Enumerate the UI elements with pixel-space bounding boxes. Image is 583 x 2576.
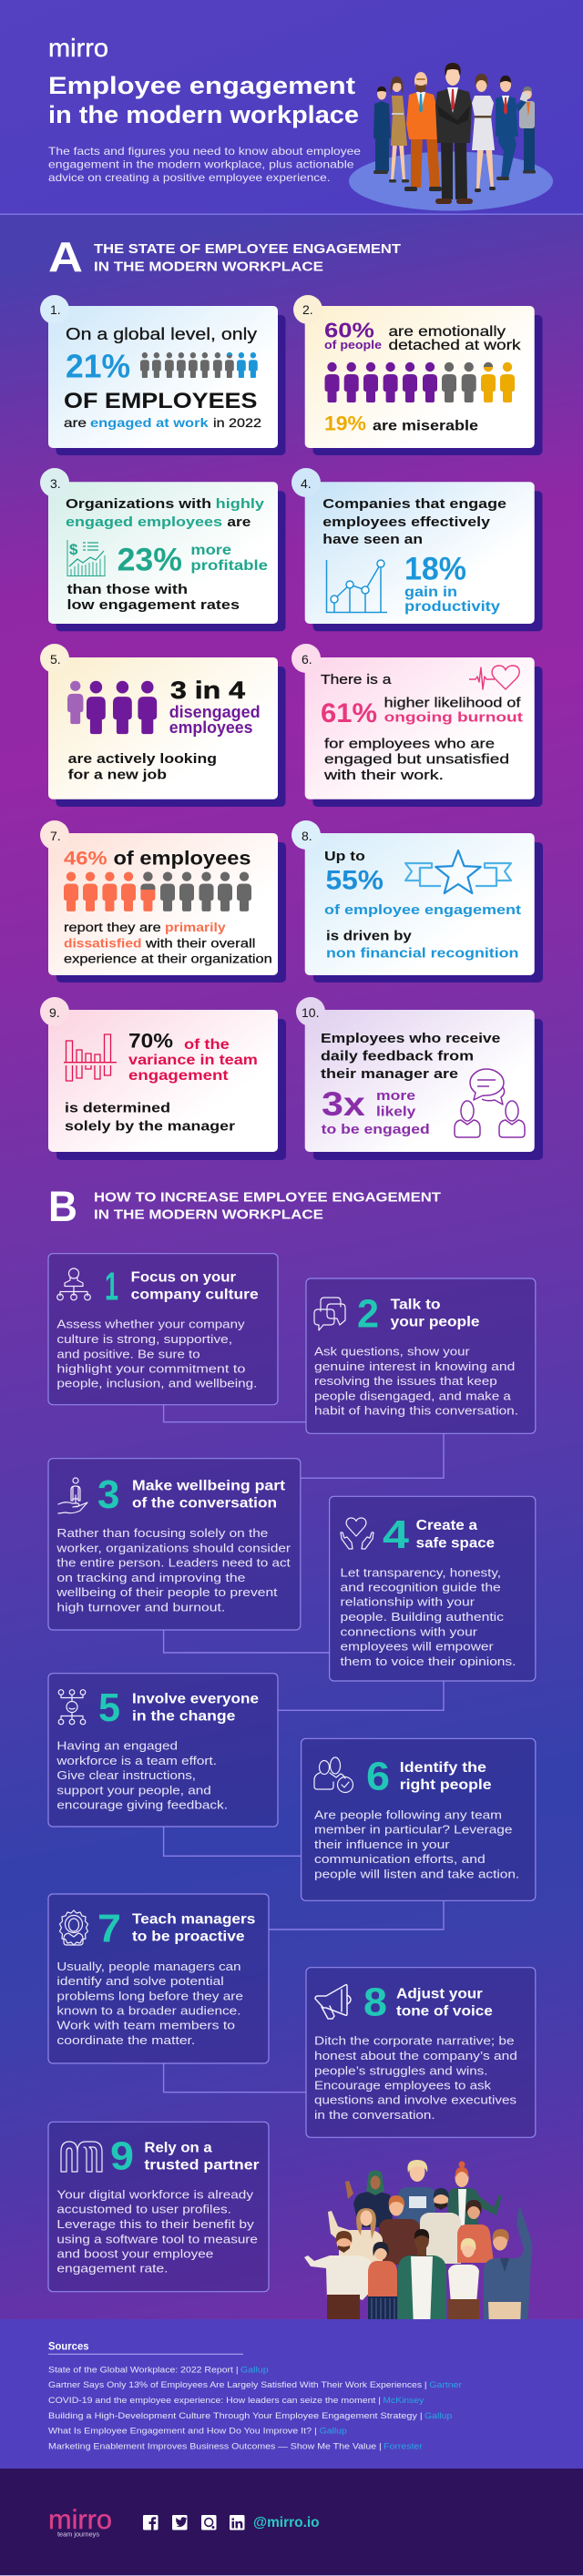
- body text: and recognition guide the: [341, 1581, 501, 1594]
- card 4 stat: 18%: 18%: [404, 552, 466, 587]
- connector 4 to 5: [278, 1681, 444, 1710]
- heading: [131, 1270, 259, 1303]
- card 1 label: [64, 389, 261, 430]
- card 8 closing text: non financial recognition: [326, 947, 518, 962]
- number 3: 3: [97, 1472, 119, 1517]
- heading: trusted partner: [144, 2157, 259, 2173]
- body text: using a software tool to measure: [56, 2232, 258, 2245]
- heading: [132, 1479, 286, 1512]
- card 4 statement: Companies that engage: [322, 497, 506, 512]
- person tan dress: [389, 76, 409, 182]
- body text: culture is strong, supportive,: [56, 1332, 232, 1346]
- body text: Give clear instructions,: [56, 1768, 196, 1782]
- source 2: Gartner: [429, 2380, 463, 2390]
- body text: known to a broader audience.: [56, 2004, 241, 2018]
- panel 3: wellbeing: [48, 1459, 301, 1630]
- source 2: Gartner Says Only 13% of Employees Are Largely Satisfied With Their Work Experiences |: [48, 2380, 427, 2390]
- card 1 label: OF EMPLOYEES: [64, 389, 257, 413]
- card 2 stat: 60%: [324, 319, 382, 351]
- icon: org chart: [57, 1268, 90, 1300]
- title: in the modern workplace: [48, 101, 359, 128]
- card 9 label: variance in team: [128, 1053, 258, 1068]
- card 6 label: ongoing burnout: [384, 711, 523, 726]
- number 4: 4: [383, 1512, 410, 1557]
- card 10 label: [322, 1088, 430, 1137]
- icon: gear with person: [60, 1910, 87, 1945]
- card 2 statement: [388, 324, 522, 353]
- header band: [0, 0, 583, 215]
- sources band: [0, 2319, 583, 2469]
- card 7 stat: 46% of employees: of employees: [113, 848, 251, 869]
- person white dress: [472, 74, 496, 192]
- card 4 label: [404, 585, 500, 615]
- card 5 closing text: are actively looking: [68, 752, 217, 767]
- body text: [56, 1960, 243, 2047]
- card 2 stat: 60%: of people: [324, 338, 382, 351]
- card 7: dissatisfied: [40, 820, 286, 983]
- heading: [416, 1518, 495, 1551]
- card 9: manager variance: [40, 997, 286, 1160]
- heading: Create a: [416, 1518, 477, 1533]
- sources heading: Sources: [48, 2342, 89, 2353]
- panel 7: managers: [48, 1894, 269, 2063]
- front row: [304, 2205, 532, 2328]
- heading: [391, 1297, 480, 1330]
- card 7: dissatisfied: 7.: [50, 829, 61, 843]
- heading: to be proactive: [132, 1929, 245, 1945]
- heading: of the conversation: [132, 1496, 277, 1512]
- body text: people will listen and take action.: [314, 1867, 519, 1880]
- card 2 statement: are emotionally: [388, 324, 506, 340]
- illustration: business team: [349, 63, 553, 211]
- section heading B: IN THE MODERN WORKPLACE: [94, 1207, 323, 1223]
- body text: relationship with your: [341, 1595, 476, 1609]
- card 5: job seekers: 5.: [50, 652, 61, 667]
- icon: heartbeat: [469, 666, 519, 689]
- connector 7 to 8: [164, 2063, 306, 2092]
- card 3 label: [190, 543, 268, 574]
- heading: Rely on a: [144, 2140, 212, 2155]
- card 8: recognition: [292, 820, 543, 983]
- card 7 stat: 46% of employees: 46%: [64, 848, 107, 869]
- card 7 stat: 46% of employees: [64, 848, 251, 869]
- card 5 label: employees: [169, 718, 253, 737]
- card 6 closing text: [323, 738, 509, 783]
- body text: connections with your: [341, 1624, 478, 1638]
- card 9 label: engagement: [128, 1068, 229, 1084]
- body text: Ask questions, show your: [314, 1345, 470, 1359]
- body text: employees will empower: [341, 1640, 494, 1654]
- source 5: What Is Employee Engagement and How Do You Improve It? |: [48, 2427, 317, 2437]
- card 4 statement: [322, 497, 506, 547]
- intro text: advice on creating a positive employee experience.: [48, 171, 330, 184]
- panel 8: tone of voice: [306, 1968, 536, 2137]
- logo: mirro: mirro: [48, 34, 108, 62]
- body text: the entire person. Leaders need to act: [56, 1556, 291, 1570]
- card 6: burnout: 6.: [302, 652, 312, 667]
- source 3: McKinsey: [383, 2396, 424, 2406]
- card 9 closing text: is determined: [65, 1101, 170, 1116]
- icon: star with ribbon: [405, 850, 511, 893]
- heading: company culture: [131, 1288, 259, 1303]
- body text: resolving the issues that keep: [314, 1374, 497, 1388]
- body text: support your people, and: [56, 1783, 211, 1797]
- card 5 closing text: [68, 752, 217, 783]
- heading: Involve everyone: [132, 1691, 259, 1706]
- icon: people with check: [314, 1757, 353, 1792]
- section heading A: [48, 233, 401, 280]
- panel 4: safe space: [330, 1496, 536, 1681]
- card 10 label: more: [376, 1088, 415, 1104]
- card 8 closing text: is driven by: [326, 930, 412, 944]
- body text: communication efforts, and: [314, 1852, 486, 1866]
- card 6 closing text: engaged but unsatisfied: [324, 753, 509, 768]
- connector 6 to 7: [269, 1900, 444, 1929]
- card 9 stat: 70%: 70%: [128, 1030, 173, 1053]
- card 6 intro: There is a: [321, 672, 392, 687]
- heading: in the change: [132, 1708, 236, 1724]
- card 3 label: profitable: [190, 558, 268, 574]
- card 3 statement: are: [227, 515, 251, 530]
- icon: facebook: [143, 2515, 159, 2530]
- body text: them to voice their opinions.: [341, 1655, 516, 1668]
- body text: workforce is a team effort.: [56, 1754, 217, 1767]
- source 4: Building a High-Development Culture Through Your Employee Engagement Strategy |: [48, 2411, 423, 2421]
- card 5 closing text: for a new job: [68, 769, 167, 783]
- handle: @mirro.io: [253, 2515, 320, 2530]
- body text: people, inclusion, and wellbeing.: [56, 1377, 257, 1390]
- card 3 closing text: than those with: [67, 583, 188, 597]
- card 1: global engagement: [40, 295, 286, 455]
- person black suit: [435, 63, 473, 204]
- card 7 closing text: dissatisfied: [64, 937, 142, 951]
- panel 5: involve everyone: [48, 1674, 278, 1827]
- body text: questions and involve executives: [314, 2093, 517, 2107]
- card 7 closing text: experience at their organization: [64, 952, 272, 966]
- card 6 label: [384, 697, 523, 726]
- body text: accustomed to user profiles.: [56, 2203, 231, 2216]
- icon: heart in hands: [341, 1518, 373, 1549]
- body text: [56, 1318, 257, 1390]
- card 5 label: disengaged: [169, 703, 261, 721]
- heading: right people: [400, 1777, 492, 1793]
- section heading A: IN THE MODERN WORKPLACE: [94, 259, 323, 275]
- panel 2: talk to your people: [306, 1278, 536, 1433]
- body text: their influence in your: [314, 1838, 450, 1851]
- connector 5 to 6: [164, 1827, 302, 1856]
- number 6: 6: [366, 1755, 390, 1799]
- card 4 label: gain in: [404, 585, 457, 600]
- card 1 statement: On a global level, only: [66, 325, 257, 343]
- body text: member in particular? Leverage: [314, 1823, 512, 1837]
- card 3 label: more: [190, 543, 231, 558]
- icon: bar chart: [64, 1034, 117, 1081]
- card 4: productivity: [292, 468, 543, 631]
- icon: line chart: [326, 560, 387, 612]
- card 4 statement: have seen an: [322, 533, 423, 547]
- body text: high turnover and burnout.: [56, 1600, 225, 1614]
- source 1: Gallup: [240, 2365, 269, 2375]
- icon: linkedin: [230, 2515, 244, 2530]
- number 5: 5: [98, 1685, 120, 1730]
- card 8 closing text: [326, 930, 518, 962]
- card 10: daily feedback: [296, 997, 543, 1160]
- body text: on tracking and improving the: [56, 1571, 245, 1584]
- card 2 stat: 60%: 60%: [324, 319, 374, 342]
- heading: your people: [391, 1315, 480, 1330]
- card 10 statement: Employees who receive: [321, 1032, 500, 1046]
- card 10 statement: daily feedback from: [321, 1049, 474, 1064]
- person navy right: [496, 76, 529, 180]
- heading: tone of voice: [396, 2003, 493, 2019]
- body text: [314, 1807, 519, 1880]
- card 7 closing text: with their overall: [145, 937, 255, 951]
- card 6 closing text: for employees who are: [324, 738, 495, 752]
- body text: [56, 2187, 258, 2276]
- body text: Work with team members to: [56, 2019, 235, 2032]
- card 7 closing text: [64, 921, 272, 966]
- card 8: recognition: 8.: [302, 829, 312, 843]
- card 8 intro: Up to: [324, 849, 365, 864]
- card 1 label: are: [64, 415, 87, 430]
- title: Employee engagement: [48, 72, 355, 99]
- card 4: productivity: 4.: [301, 476, 312, 491]
- middle row: [328, 2188, 494, 2265]
- card 10: daily feedback: 10.: [302, 1005, 319, 1020]
- card 5 people chart: [67, 681, 157, 734]
- card 6: burnout: [292, 644, 543, 807]
- heading: [400, 1760, 492, 1793]
- body text: [314, 1345, 518, 1418]
- card 2 statement: detached at work: [388, 338, 522, 353]
- source 3: COVID-19 and the employee experience: How leaders can seize the moment |: [48, 2396, 381, 2406]
- panel 9: trusted partner: [48, 2122, 269, 2292]
- card 2 stat: 19% miserable: [324, 412, 478, 435]
- heading: Focus on your: [131, 1270, 236, 1286]
- body text: Rather than focusing solely on the: [56, 1526, 268, 1540]
- icon: instagram: [201, 2515, 217, 2530]
- card 9 label: [128, 1037, 258, 1084]
- card 1: global engagement: 1.: [50, 302, 61, 317]
- source 4: Gallup: [424, 2411, 452, 2421]
- card 9: manager variance: 9.: [49, 1005, 60, 1020]
- body text: people disengaged, and make a: [314, 1389, 512, 1402]
- card 9 closing text: [65, 1101, 235, 1135]
- number 9: 9: [110, 2134, 134, 2179]
- body text: problems long before they are: [56, 1989, 243, 2002]
- icon: mirro mark: [61, 2142, 102, 2172]
- icon: finance chart: $: [69, 541, 78, 558]
- card 10 stat: 3x: 3x: [322, 1085, 365, 1123]
- body text: Your digital workforce is already: [56, 2187, 254, 2201]
- icon: person on hand: [58, 1478, 87, 1513]
- card 9 closing text: solely by the manager: [65, 1119, 235, 1135]
- heading: Adjust your: [396, 1986, 483, 2001]
- body text: and positive. Be sure to: [56, 1347, 200, 1360]
- body text: [314, 2034, 517, 2122]
- card 2 people chart: [324, 362, 515, 402]
- body text: people. Building authentic: [341, 1610, 505, 1624]
- number 2: 2: [357, 1291, 379, 1336]
- section heading B: [48, 1182, 441, 1230]
- heading: Teach managers: [132, 1912, 256, 1928]
- icon: conversation: [455, 1069, 525, 1137]
- person orange suit: [404, 72, 442, 191]
- icon: speech bubbles: [314, 1298, 345, 1330]
- heading: Identify the: [400, 1760, 486, 1776]
- heading: Talk to: [391, 1297, 441, 1312]
- body text: [56, 1739, 228, 1812]
- body text: and boost your employee: [56, 2246, 213, 2260]
- body text: Ditch the corporate narrative; be: [314, 2034, 514, 2048]
- person navy left: [373, 87, 391, 174]
- title: [48, 72, 359, 128]
- icon: finance chart: [67, 540, 105, 575]
- card 3 statement: [66, 497, 264, 530]
- card 3: profitable: [40, 468, 286, 631]
- card 5 label: [169, 703, 261, 737]
- body text: Leverage this to their benefit by: [56, 2217, 254, 2231]
- source 5: Gallup: [320, 2427, 347, 2437]
- intro text: The facts and figures you need to know about employee: [48, 145, 361, 158]
- card 2 stat: 19% miserable: are miserable: [373, 419, 478, 434]
- panel 1: company culture: [48, 1254, 278, 1405]
- body text: worker, organizations should consider: [56, 1541, 292, 1554]
- card 6 label: higher likelihood of: [384, 697, 522, 711]
- card 4 statement: employees effectively: [322, 515, 490, 530]
- card 10 statement: their manager are: [321, 1067, 458, 1082]
- card 1 label: engaged at work: [90, 415, 209, 430]
- card 9 label: of the: [184, 1037, 230, 1053]
- body text: in the conversation.: [314, 2108, 435, 2122]
- body text: wellbeing of their people to prevent: [56, 1585, 278, 1599]
- illustration: diverse crowd: [304, 2160, 532, 2328]
- heading: [132, 1912, 256, 1945]
- body text: [56, 1526, 292, 1614]
- body text: Having an engaged: [56, 1739, 178, 1753]
- source 6: Forrester: [384, 2442, 424, 2452]
- heading: safe space: [416, 1535, 495, 1551]
- card 8 stat: 55%: 55%: [326, 866, 384, 896]
- card 7 closing text: primarily: [165, 921, 226, 934]
- section heading B: HOW TO INCREASE EMPLOYEE ENGAGEMENT: [94, 1189, 441, 1205]
- intro text: engagement in the modern workplace, plus actionable: [48, 158, 354, 171]
- card 8 label: of employee engagement: [324, 903, 521, 918]
- connector 2 to 3: [301, 1433, 444, 1478]
- body text: Encourage employees to ask: [314, 2079, 492, 2092]
- body text: Assess whether your company: [56, 1318, 245, 1331]
- card 4 label: productivity: [404, 599, 500, 615]
- card 3 closing text: [67, 583, 240, 613]
- intro text: [48, 145, 361, 184]
- body text: identify and solve potential: [56, 1974, 224, 1988]
- card 3: profitable: 3.: [50, 476, 61, 491]
- icon: team tree: [58, 1690, 86, 1725]
- footer logo: mirro: [48, 2505, 112, 2535]
- card 7 closing text: report they are: [64, 921, 161, 934]
- card 6 closing text: with their work.: [323, 769, 444, 783]
- section heading A: A: [48, 233, 83, 280]
- icon: twitter: [172, 2515, 188, 2530]
- body text: honest about the company’s and: [314, 2049, 517, 2062]
- heading: Make wellbeing part: [132, 1479, 286, 1494]
- body text: coordinate the matter.: [56, 2033, 195, 2047]
- card 2: emotionally detached: 2.: [302, 302, 313, 317]
- source 1: State of the Global Workplace: 2022 Report |: [48, 2365, 239, 2375]
- card 5: job seekers: [40, 644, 286, 807]
- section heading B: B: [48, 1182, 77, 1230]
- card 1 people chart: [140, 352, 258, 378]
- card 5 stat: 3 in 4: 3 in 4: [170, 677, 245, 704]
- body text: [341, 1565, 516, 1668]
- card 3 statement: highly: [216, 497, 264, 512]
- body text: encourage giving feedback.: [56, 1798, 228, 1812]
- connector 3 to 4: [164, 1630, 330, 1653]
- body text: genuine interest in knowing and: [314, 1359, 515, 1373]
- body text: Let transparency, honesty,: [341, 1565, 501, 1579]
- card 7 people chart: [64, 871, 251, 911]
- heading: [396, 1986, 493, 2019]
- heading: [132, 1691, 259, 1724]
- body text: Are people following any team: [314, 1807, 502, 1821]
- number 1: 1: [105, 1265, 118, 1309]
- body text: highlight your commitment to: [56, 1362, 245, 1376]
- connector 1 to 2: [164, 1405, 306, 1422]
- card 3 closing text: low engagement rates: [67, 598, 240, 613]
- card 3 stat: 23%: 23%: [118, 543, 182, 578]
- footer band: [0, 2469, 583, 2576]
- person grey vest: [519, 87, 536, 173]
- body text: people’s struggles and wins.: [314, 2063, 488, 2077]
- card 10 label: to be engaged: [322, 1122, 430, 1137]
- body text: engagement rate.: [56, 2262, 168, 2276]
- body text: Usually, people managers can: [56, 1960, 241, 1973]
- card 6 stat: 61%: 61%: [321, 698, 377, 728]
- card 3 statement: Organizations with: [66, 497, 211, 512]
- card 2 stat: 19% miserable: 19%: [324, 412, 366, 435]
- icon: megaphone: [315, 1985, 351, 2019]
- card 3 statement: engaged employees: [66, 515, 222, 530]
- number 8: 8: [363, 1980, 387, 2024]
- panel 6: right people: [302, 1738, 536, 1900]
- body text: habit of having this conversation.: [314, 1404, 518, 1418]
- number 7: 7: [97, 1906, 121, 1950]
- source 6: Marketing Enablement Improves Business Outcomes — Show Me The Value |: [48, 2442, 382, 2452]
- card 2: emotionally detached: [293, 295, 543, 455]
- card 10 statement: [321, 1032, 500, 1082]
- back row: [345, 2160, 502, 2231]
- card 1 label: in 2022: [213, 415, 261, 430]
- card 10 label: likely: [376, 1105, 416, 1120]
- footer logo: team journeys: [57, 2530, 99, 2539]
- card 1 stat: 21%: 21%: [66, 347, 130, 384]
- heading: [144, 2140, 259, 2173]
- section heading A: THE STATE OF EMPLOYEE ENGAGEMENT: [94, 241, 401, 257]
